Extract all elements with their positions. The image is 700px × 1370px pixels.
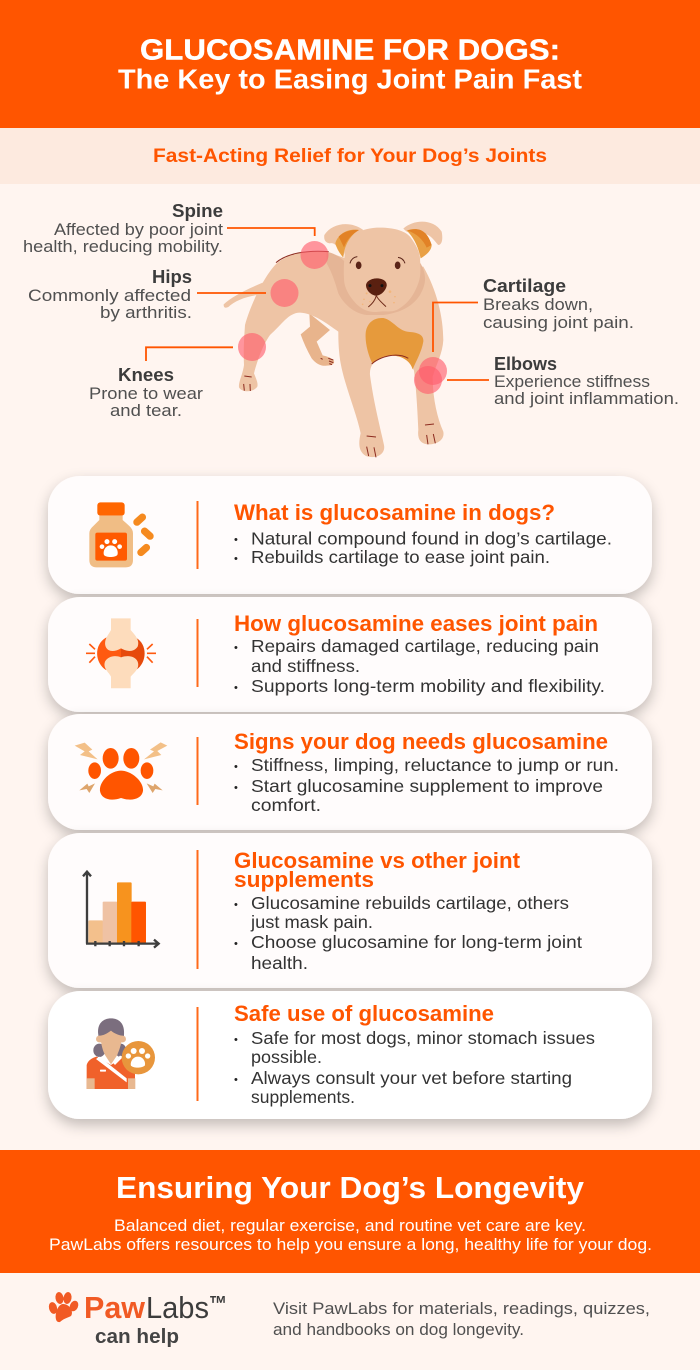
footer text: Visit PawLabs for materials, readings, quizzes, [273,1299,650,1318]
card: signs: Stiffness, limping, reluctance to jump or run. [251,755,619,775]
card: signs: Start glucosamine supplement to improve [251,776,603,796]
label: elbows: Elbows [494,354,557,374]
title banner: GLUCOSAMINE FOR DOGS: [140,34,560,66]
left ear [324,224,363,257]
card: safe use: Safe for most dogs, minor stomach issues [251,1028,595,1048]
title banner [0,0,700,128]
card: signs: comfort. [251,795,321,815]
joint highlights [238,241,447,394]
card: what is glucosamine: • [234,553,238,565]
icon: supplement bottle [89,502,155,567]
icon: paw with pain bolts [75,742,167,800]
right ear [403,222,442,258]
card: safe use: possible. [251,1047,322,1067]
label: spine: Affected by poor joint [54,220,223,239]
card: versus others [48,833,652,988]
card: versus others: Glucosamine rebuilds cartilage, others [251,893,569,913]
longevity banner: Ensuring Your Dog’s Longevity [116,1170,585,1205]
dog illustration [224,222,444,457]
footer text: and handbooks on dog longevity. [273,1320,524,1339]
head [344,228,420,312]
card: versus others: health. [251,953,308,973]
card: versus others: supplements [234,867,374,892]
label: elbows [447,354,679,408]
PawLabs logo: Labs [146,1290,209,1325]
card: safe use: Safe use of glucosamine [234,1001,494,1026]
icon: bar chart [83,872,159,948]
chest patch [366,318,423,369]
far hind leg [301,313,334,366]
card: versus others: Glucosamine vs other joint [234,848,521,873]
title banner: The Key to Easing Joint Pain Fast [118,64,582,94]
card: what is glucosamine: Natural compound found in dog’s cartilage. [251,528,612,548]
PawLabs logo: Paw [84,1290,146,1325]
label: cartilage: causing joint pain. [483,313,634,332]
longevity banner: PawLabs offers resources to help you ensure a long, healthy life for your dog. [49,1236,652,1254]
footer text [273,1299,650,1339]
card: safe use [48,991,652,1119]
card: how it eases pain: Repairs damaged cartilage, reducing pain [251,636,599,656]
neck shading [327,252,425,315]
label: spine: health, reducing mobility. [23,237,223,256]
card: safe use: • [234,1034,238,1046]
label: hips [28,267,266,322]
card: signs: Signs your dog needs glucosamine [234,729,608,754]
longevity banner: Balanced diet, regular exercise, and routine vet care are key. [114,1217,586,1235]
label: knees: Knees [118,365,174,385]
tail [224,283,263,308]
card: how it eases pain: How glucosamine eases joint pain [234,611,598,636]
card: signs: • [234,782,238,794]
label: knees: and tear. [110,401,182,420]
icon: joint [86,618,156,688]
card: versus others: • [234,938,238,950]
eyes and brows [350,257,405,269]
card: how it eases pain: Supports long-term mobility and flexibility. [251,676,605,696]
nose and mouth [366,278,387,307]
longevity banner [0,1150,700,1273]
label: spine: Spine [172,201,223,221]
card: safe use: supplements. [251,1087,355,1107]
label: cartilage [433,276,634,352]
card: versus others: Choose glucosamine for long-term joint [251,932,582,952]
card: signs [48,714,652,830]
card: how it eases pain: and stiffness. [251,656,360,676]
label: cartilage: Breaks down, [483,295,593,314]
label: hips: by arthritis. [100,303,192,322]
icon: logo paw [48,1291,80,1322]
label: elbows: and joint inflammation. [494,389,679,408]
PawLabs logo: can help [95,1326,179,1348]
PawLabs logo [48,1290,227,1348]
icon: vet with paw badge [87,1018,155,1089]
belly arc [372,355,408,364]
label: cartilage: Cartilage [483,276,566,296]
body and legs [239,251,444,457]
card: versus others: • [234,899,238,911]
card: signs: • [234,761,238,773]
subtitle band [0,128,700,184]
back line [276,251,329,263]
card: safe use: Always consult your vet before starting [251,1068,572,1088]
card: versus others: just mask pain. [250,912,373,932]
card: what is glucosamine: What is glucosamine in dogs? [234,500,555,525]
label: hips: Commonly affected [28,286,191,305]
label: knees: Prone to wear [89,384,203,403]
card: what is glucosamine: • [234,534,238,546]
card: safe use: • [234,1074,238,1086]
freckles [362,290,396,305]
subtitle band: Fast-Acting Relief for Your Dog’s Joints [153,146,547,167]
PawLabs logo: ™ [209,1291,227,1316]
label: elbows: Experience stiffness [494,372,650,391]
card: what is glucosamine: Rebuilds cartilage to ease joint pain. [251,547,550,567]
card: how it eases pain [48,597,652,712]
label: spine [23,201,315,256]
card: how it eases pain: • [234,682,238,694]
label: hips: Hips [152,267,192,287]
card: what is glucosamine [48,476,652,594]
label: knees [89,347,233,420]
card: how it eases pain: • [234,642,238,654]
toes [244,358,435,457]
